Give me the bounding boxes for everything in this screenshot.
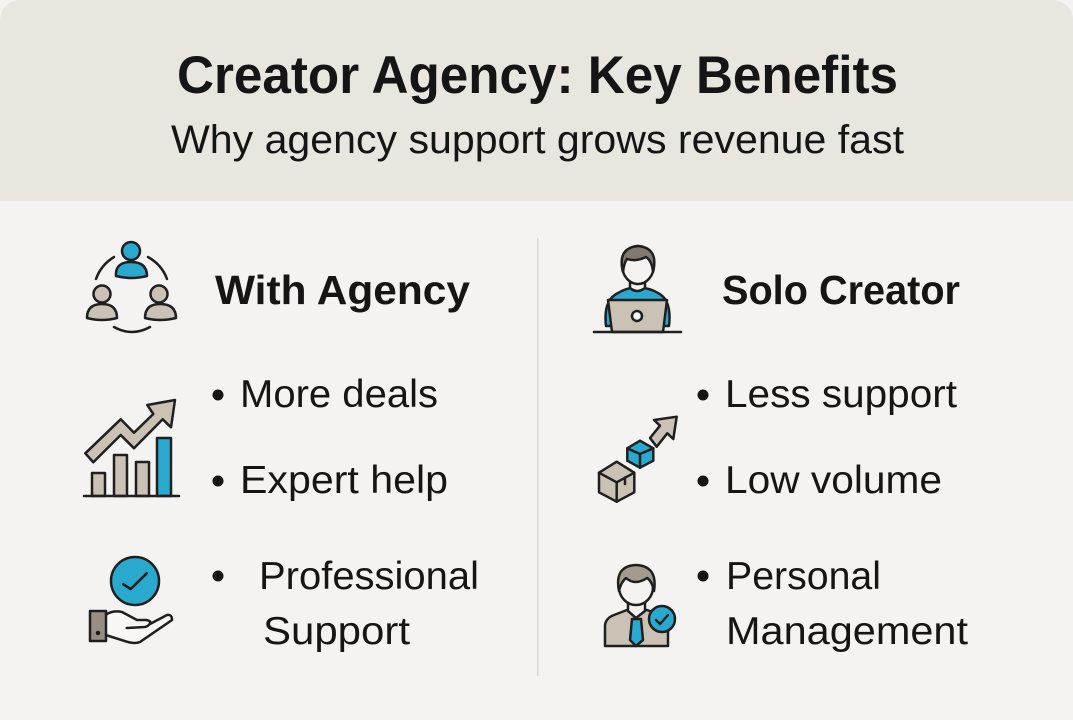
panel: with agency xyxy=(84,242,479,653)
list item: professional support xyxy=(212,555,479,653)
list item: low volume: Low volume xyxy=(725,459,942,502)
heading: solo creator: Solo Creator xyxy=(722,267,960,313)
list item: expert help: Expert help xyxy=(240,459,448,502)
list item: personal management xyxy=(698,555,968,653)
icon: three people network xyxy=(87,242,176,332)
list item: more deals: More deals xyxy=(240,373,438,416)
icon: growth chart xyxy=(84,400,179,496)
icon: person at laptop xyxy=(594,246,681,332)
panel: solo creator xyxy=(594,246,968,653)
list item: professional support: Support xyxy=(263,610,410,653)
list item: less support: Less support xyxy=(725,373,957,416)
icon: hand with check xyxy=(90,557,172,643)
title: Creator Agency: Key Benefits xyxy=(177,46,898,105)
subtitle: Why agency support grows revenue fast xyxy=(171,118,904,162)
icon: boxes and arrow xyxy=(599,417,677,502)
list item: personal management: Personal xyxy=(726,555,881,598)
list item: professional support: Professional xyxy=(259,555,479,598)
panel: header band xyxy=(0,0,1073,201)
heading: with agency: With Agency xyxy=(215,267,470,313)
icon: manager with badge xyxy=(605,565,675,646)
list item: personal management: Management xyxy=(726,610,968,653)
